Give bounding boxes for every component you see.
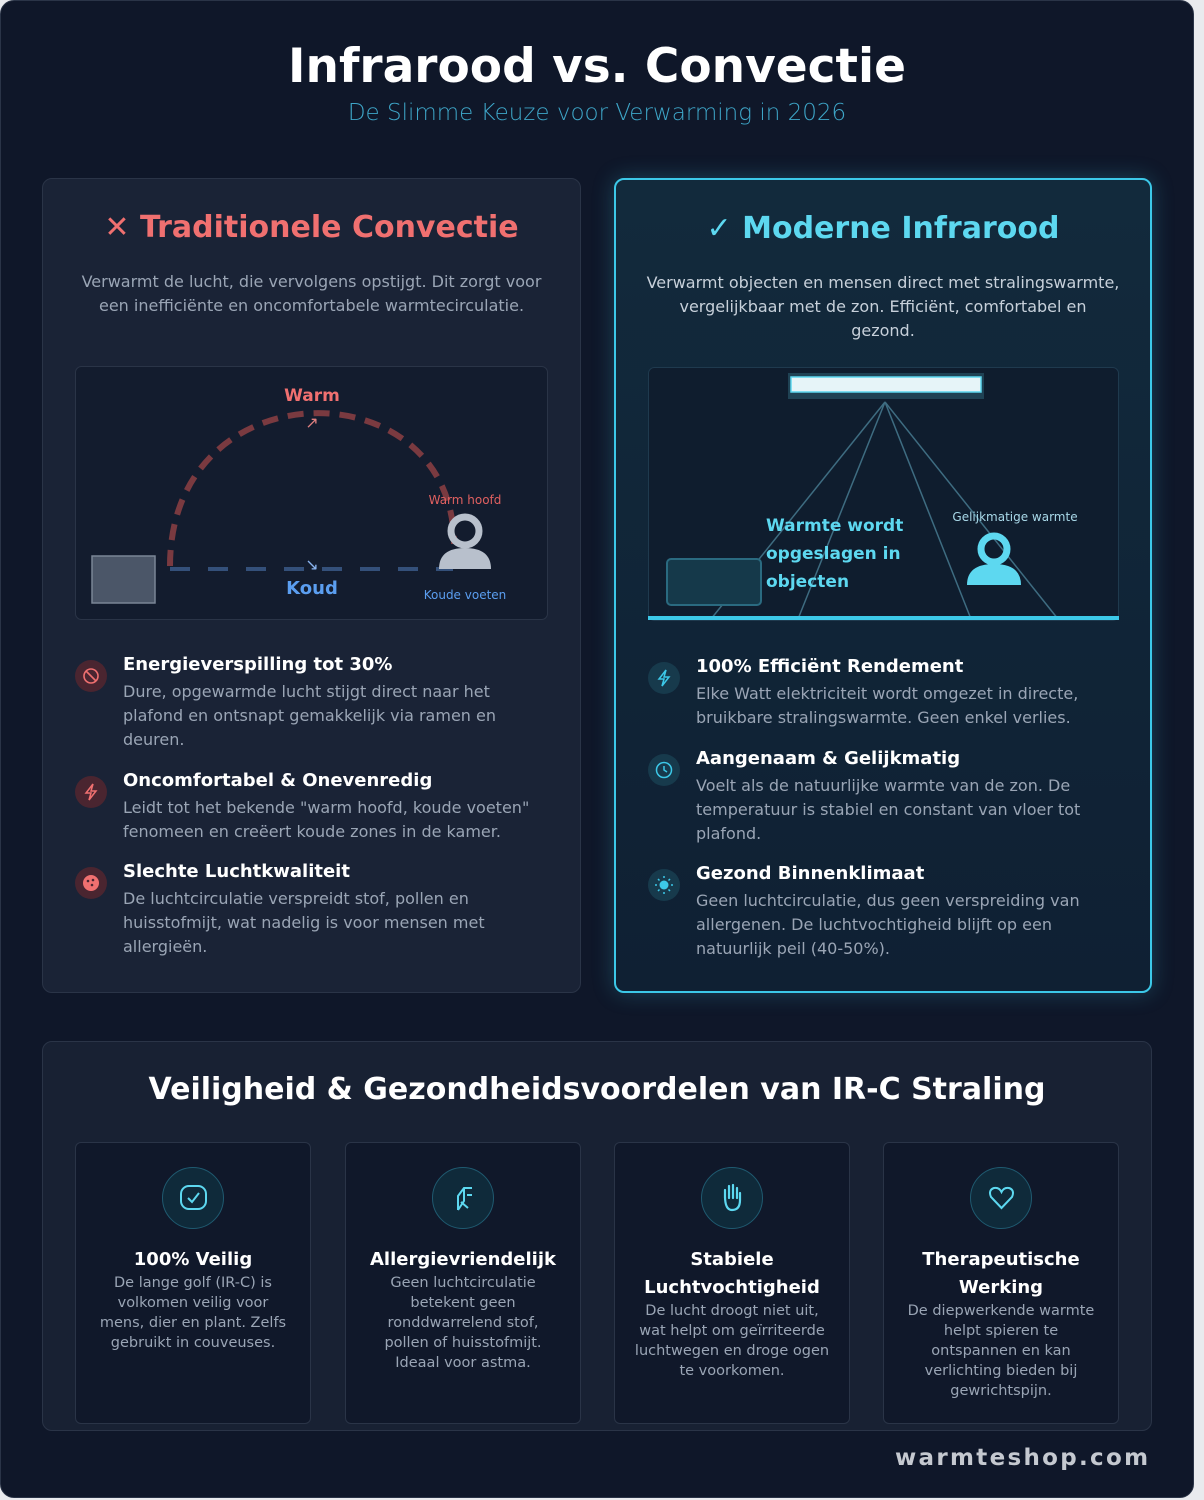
card: therapeutisch: helpt spieren te <box>944 1323 1058 1339</box>
card: allergievriendelijk: pollen of huisstofmijt. <box>384 1335 542 1351</box>
card: allergievriendelijk <box>345 1142 581 1424</box>
warm air arc <box>170 413 454 566</box>
cold floor line <box>170 567 453 571</box>
item: aangenaam: Aangenaam & Gelijkmatig <box>696 748 960 769</box>
icon: allergy <box>432 1167 494 1229</box>
description: Verwarmt objecten en mensen direct met stralingswarmte, <box>647 273 1119 292</box>
item: gezond: allergenen. De luchtvochtigheid blijft op een <box>696 915 1052 934</box>
card: luchtvochtigheid: te voorkomen. <box>679 1363 785 1379</box>
subtitle: De Slimme Keuze voor Verwarming in 2026 <box>348 100 846 126</box>
item: efficient: 100% Efficiënt Rendement <box>696 656 963 677</box>
item: oncomfortabel: Leidt tot het bekende "warm hoofd, koude voeten" <box>123 798 529 817</box>
item: luchtkwaliteit: Slechte Luchtkwaliteit <box>123 861 350 882</box>
item: aangenaam <box>648 748 1080 843</box>
card: veilig: gebruikt in couveuses. <box>111 1335 275 1351</box>
card: luchtvochtigheid: Luchtvochtigheid <box>644 1277 820 1298</box>
description: gezond. <box>851 321 915 340</box>
icon: radiator <box>92 556 155 603</box>
card: veilig: mens, dier en plant. Zelfs <box>100 1315 286 1331</box>
diagram: convection: ↘ <box>305 555 319 574</box>
item: oncomfortabel: Oncomfortabel & Onevenredig <box>123 770 432 791</box>
card: luchtvochtigheid: De lucht droogt niet uit, <box>645 1303 819 1319</box>
card: veilig <box>75 1142 311 1424</box>
item: aangenaam: Voelt als de natuurlijke warmte van de zon. De <box>696 776 1070 795</box>
item: aangenaam: temperatuur is stabiel en constant van vloer tot <box>696 800 1080 819</box>
item: energieverspilling: plafond en ontsnapt gemakkelijk via ramen en <box>123 706 496 725</box>
label: koud: Koud <box>286 578 338 599</box>
title: Infrarood vs. Convectie <box>288 39 906 94</box>
item: efficient: bruikbare stralingswarmte. Geen enkel verlies. <box>696 708 1071 727</box>
diagram: infrared <box>648 367 1119 621</box>
description <box>82 272 542 315</box>
item: energieverspilling: Dure, opgewarmde lucht stijgt direct naar het <box>123 682 490 701</box>
heading: veiligheid: Veiligheid & Gezondheidsvoordelen van IR-C Straling <box>149 1072 1045 1107</box>
description: een inefficiënte en oncomfortabele warmtecirculatie. <box>99 296 524 315</box>
description <box>646 273 1119 340</box>
card: allergievriendelijk: Allergievriendelijk <box>370 1249 556 1270</box>
diagram: convection: ↗ <box>305 413 319 432</box>
card: therapeutisch: De diepwerkende warmte <box>908 1303 1094 1319</box>
item: gezond <box>648 863 1080 958</box>
icon: heart <box>970 1167 1032 1229</box>
card: luchtvochtigheid: Stabiele <box>690 1249 774 1270</box>
item: gezond: Geen luchtcirculatie, dus geen verspreiding van <box>696 891 1080 910</box>
card: therapeutisch: Werking <box>959 1277 1043 1298</box>
card: veilig: volkomen veilig voor <box>118 1295 268 1311</box>
label: stored heat: objecten <box>766 572 849 592</box>
card: veilig: 100% Veilig <box>134 1249 252 1270</box>
infrared panel <box>788 373 984 399</box>
icon: shield clock <box>162 1167 224 1229</box>
item: energieverspilling <box>75 654 496 749</box>
heading: moderne infrarood: ✓ Moderne Infrarood <box>707 211 1059 246</box>
card: veilig: De lange golf (IR-C) is <box>114 1275 272 1291</box>
item: gezond: natuurlijk peil (40-50%). <box>696 939 890 958</box>
label: warm: Warm <box>284 386 340 406</box>
icon: person <box>967 536 1021 585</box>
item: efficient: Elke Watt elektriciteit wordt omgezet in directe, <box>696 684 1078 703</box>
floor <box>648 616 1119 620</box>
card: allergievriendelijk: betekent geen <box>410 1295 516 1311</box>
card: therapeutisch: Therapeutische <box>922 1249 1080 1270</box>
item: energieverspilling: Energieverspilling tot 30% <box>123 654 392 675</box>
card: allergievriendelijk: Ideaal voor astma. <box>395 1355 531 1371</box>
watermark: warmteshop.com <box>895 1445 1150 1471</box>
panel: infrarood <box>614 178 1152 993</box>
card: therapeutisch <box>883 1142 1119 1424</box>
diagram: convection: Koude voeten <box>424 588 506 602</box>
card: therapeutisch: gewrichtspijn. <box>950 1383 1052 1399</box>
description: Verwarmt de lucht, die vervolgens opstijgt. Dit zorgt voor <box>82 272 541 291</box>
icon: hand <box>701 1167 763 1229</box>
panel: veiligheid <box>42 1041 1152 1431</box>
item: oncomfortabel: fenomeen en creëert koude zones in de kamer. <box>123 822 501 841</box>
label: stored heat: Warmte wordt <box>766 516 903 536</box>
card: therapeutisch: verlichting bieden bij <box>925 1363 1077 1379</box>
item: luchtkwaliteit: allergieën. <box>123 937 207 956</box>
item: luchtkwaliteit: huisstofmijt, wat nadelig is voor mensen met <box>123 913 485 932</box>
card: luchtvochtigheid <box>614 1142 850 1424</box>
description: vergelijkbaar met de zon. Efficiënt, comfortabel en <box>679 297 1087 316</box>
radiation rays <box>711 402 1058 619</box>
item: efficient <box>648 656 1078 727</box>
item: luchtkwaliteit: De luchtcirculatie verspreidt stof, pollen en <box>123 889 469 908</box>
diagram: convection <box>75 366 548 620</box>
item: energieverspilling: deuren. <box>123 730 184 749</box>
card: therapeutisch: ontspannen en kan <box>931 1343 1071 1359</box>
icon: person <box>439 517 491 569</box>
card: luchtvochtigheid: wat helpt om geïrriteerde <box>639 1323 825 1339</box>
item: oncomfortabel <box>75 770 529 841</box>
card: allergievriendelijk: Geen luchtcirculatie <box>390 1275 536 1291</box>
diagram: convection: Warm hoofd <box>429 493 501 507</box>
diagram: infrared: Gelijkmatige warmte <box>952 510 1078 524</box>
item: gezond: Gezond Binnenklimaat <box>696 863 924 884</box>
item: luchtkwaliteit <box>75 861 485 956</box>
heading: traditionele convectie: ✕ Traditionele Convectie <box>104 210 519 245</box>
object <box>667 559 761 605</box>
panel: convectie <box>42 178 581 993</box>
item: aangenaam: plafond. <box>696 824 761 843</box>
card: allergievriendelijk: ronddwarrelend stof, <box>388 1315 538 1331</box>
label: stored heat: opgeslagen in <box>766 544 901 564</box>
card: luchtvochtigheid: luchtwegen en droge ogen <box>635 1343 829 1359</box>
